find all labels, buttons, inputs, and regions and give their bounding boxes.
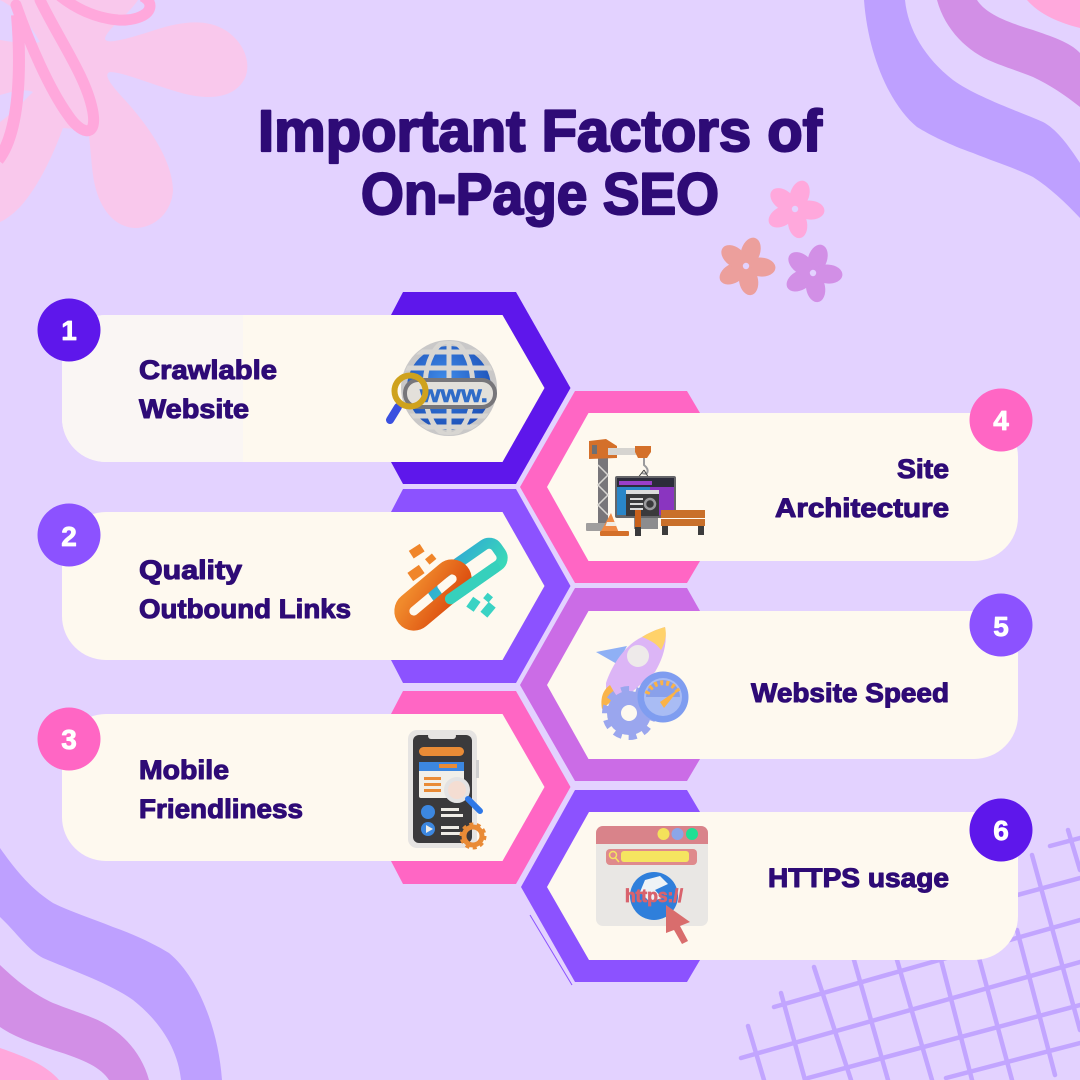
icon: website under construction crane: [586, 439, 705, 536]
title: [258, 99, 823, 227]
icon: rocket with gear and speedometer: [596, 627, 688, 737]
badge: number 5: [970, 594, 1032, 656]
badge: number 4: 4: [993, 405, 1009, 436]
icon: chain link: [397, 540, 506, 628]
panel: 2 Quality Outbound Links: [62, 489, 570, 683]
text: Crawlable Website: Crawlable: [139, 355, 277, 385]
text: Site Architecture: Architecture: [775, 493, 949, 523]
icon: smartphone: [408, 730, 485, 848]
badge: number 1: [38, 298, 100, 362]
panel: 3 Mobile Friendliness: [62, 691, 570, 884]
icon: www globe with magnifier: www.: [419, 381, 488, 407]
text: Site Architecture: [775, 454, 949, 523]
text: Quality Outbound Links: Outbound Links: [139, 594, 351, 624]
decoration: three small flowers: [716, 178, 843, 304]
decoration: bottom-left wavy stripes: [0, 848, 222, 1080]
panel: 5 Website Speed: [520, 588, 1018, 781]
text: Crawlable Website: [139, 355, 277, 424]
badge: number 5: 5: [993, 611, 1009, 642]
badge: number 4: [970, 388, 1032, 452]
badge: number 1: 1: [61, 315, 77, 346]
title: On-Page SEO: [361, 162, 719, 227]
panel: 6 HTTPS usage: [521, 790, 1018, 985]
text: Mobile Friendliness: Friendliness: [139, 794, 303, 824]
text: HTTPS usage: HTTPS usage: [768, 863, 949, 893]
badge: number 2: [38, 504, 100, 566]
decoration: top-right wavy stripes: [864, 0, 1080, 218]
text: Quality Outbound Links: Quality: [139, 555, 242, 585]
text: Mobile Friendliness: [139, 755, 303, 824]
text: Site Architecture: Site: [897, 454, 949, 484]
text: Crawlable Website: Website: [139, 394, 249, 424]
panel: 4 Site Architecture: [520, 391, 1018, 583]
badge: number 6: [970, 798, 1032, 862]
decoration: top-left flower: [0, 0, 247, 228]
badge: number 3: [38, 708, 100, 770]
icon: browser window with https globe: [596, 826, 708, 944]
badge: number 2: 2: [61, 521, 77, 552]
icon: www globe with magnifier: [390, 340, 498, 436]
panel: 1 Crawlable Website: [62, 292, 570, 484]
badge: number 3: 3: [61, 724, 77, 755]
title: Important Factors of: [258, 99, 823, 164]
text: Mobile Friendliness: Mobile: [139, 755, 229, 785]
decoration: bottom-right hand-drawn grid: [741, 830, 1080, 1080]
text: Quality Outbound Links: [139, 555, 351, 624]
text: Website Speed: Website Speed: [751, 678, 949, 708]
icon: browser window with https globe: https://: [625, 886, 683, 906]
badge: number 6: 6: [993, 815, 1009, 846]
